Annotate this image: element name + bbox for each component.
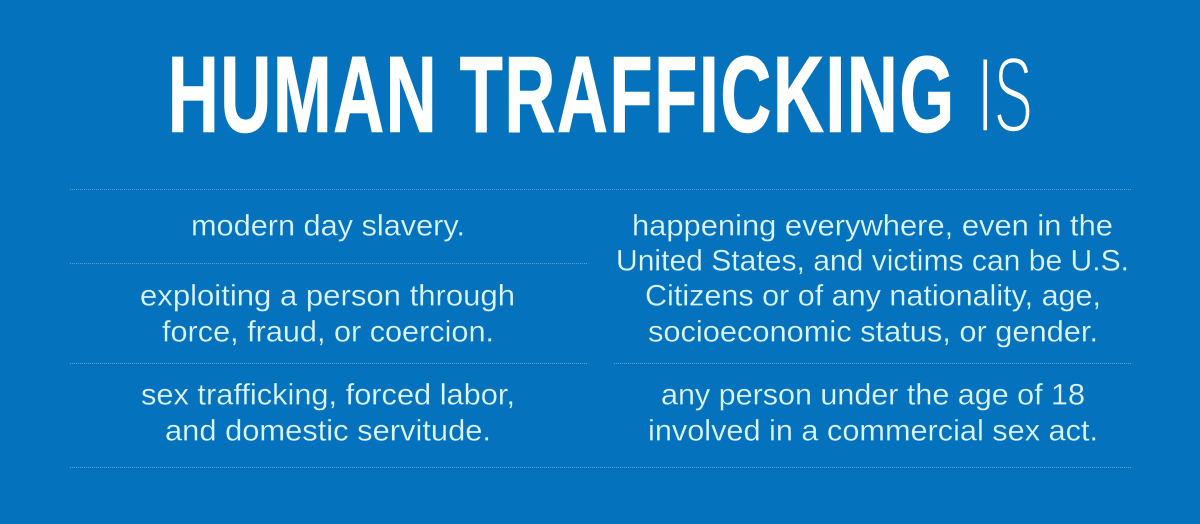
text block: happening everywhere: United States, and victims can be U.S. — [616, 244, 1129, 278]
text block: happening everywhere: socioeconomic status, or gender. — [648, 316, 1098, 348]
title: IS — [977, 34, 1033, 155]
text block: exploiting a person: exploiting a person through — [140, 280, 515, 312]
text block: any person under 18: any person under the age of 18 — [661, 378, 1085, 412]
text block: happening everywhere — [616, 210, 1129, 348]
text block: sex trafficking — [141, 378, 515, 448]
text block: happening everywhere: Citizens or of any nationality, age, — [645, 280, 1101, 312]
text block: exploiting a person: force, fraud, or coercion. — [162, 316, 494, 348]
text block: modern day slavery: modern day slavery. — [191, 210, 465, 242]
text block: sex trafficking: sex trafficking, forced labor, — [141, 378, 515, 412]
text block: any person under 18 — [648, 378, 1098, 448]
text block: exploiting a person — [140, 280, 515, 348]
text block: any person under 18: involved in a commercial sex act. — [648, 414, 1098, 448]
text block: happening everywhere: happening everywhere, even in the — [632, 210, 1113, 242]
text block: sex trafficking: and domestic servitude. — [165, 414, 491, 448]
